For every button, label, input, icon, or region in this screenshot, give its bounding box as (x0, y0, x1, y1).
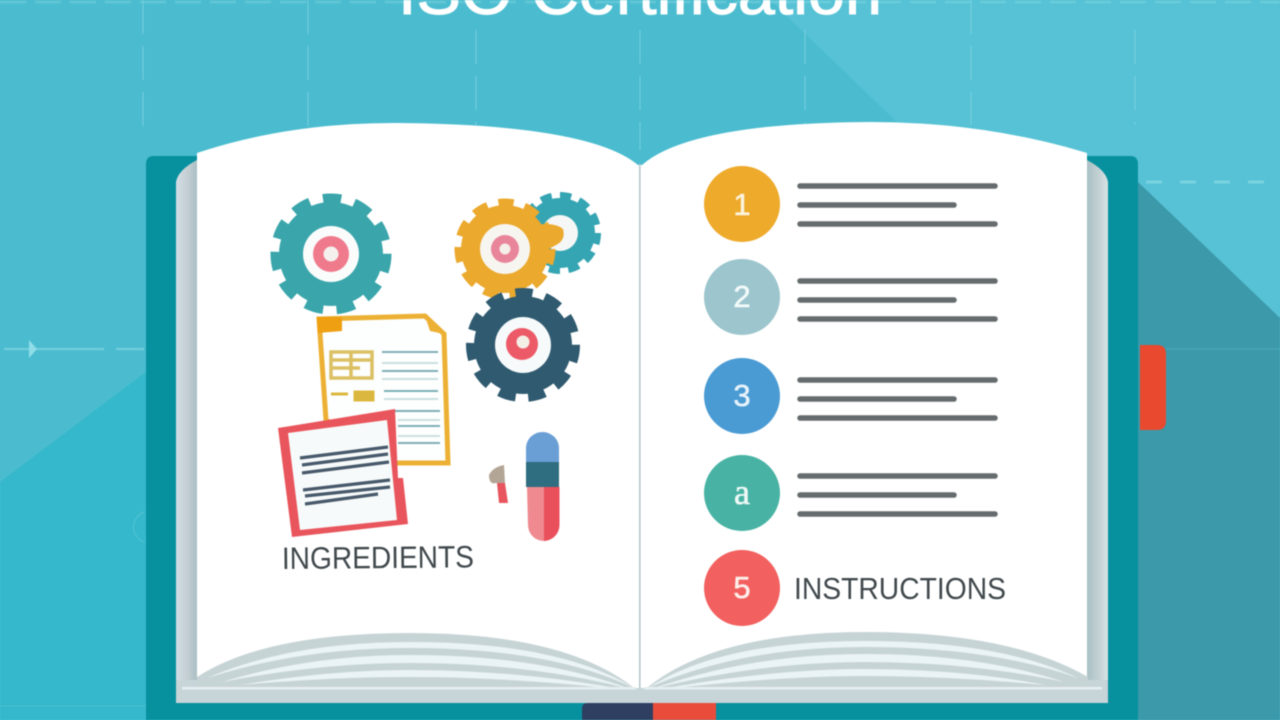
icon: pill (526, 432, 560, 541)
label: instructions: INSTRUCTIONS (794, 571, 1006, 606)
open book (146, 122, 1166, 720)
page edges right (642, 632, 1088, 692)
step 5 (704, 550, 780, 626)
step 2 (704, 259, 995, 335)
gear: teal left (276, 199, 386, 309)
page bottom band (176, 687, 1108, 703)
right page (642, 122, 1087, 688)
document: yellow (317, 316, 448, 463)
step 2: 2 (733, 279, 751, 314)
step 4: a (734, 472, 750, 512)
book cover (146, 156, 1138, 720)
spine (637, 164, 643, 690)
step 1: 1 (733, 187, 751, 222)
step 4 (704, 455, 995, 531)
step 3: 3 (733, 378, 751, 413)
left page (197, 123, 638, 688)
gear: teal back (523, 196, 597, 270)
icon: small tube (489, 465, 508, 503)
gear: yellow (459, 203, 564, 295)
document: red (278, 409, 408, 537)
bookmark: red (653, 701, 716, 720)
step 5: 5 (733, 570, 751, 605)
page edges left (197, 633, 639, 692)
label: ingredients: INGREDIENTS (282, 539, 474, 576)
bookmark tab: right (1140, 345, 1166, 430)
page block (176, 160, 1108, 703)
step 3 (704, 358, 995, 434)
bookmark: navy (582, 703, 653, 720)
step 1 (704, 166, 995, 242)
spine notch background (560, 150, 720, 180)
gear: navy (471, 293, 575, 397)
